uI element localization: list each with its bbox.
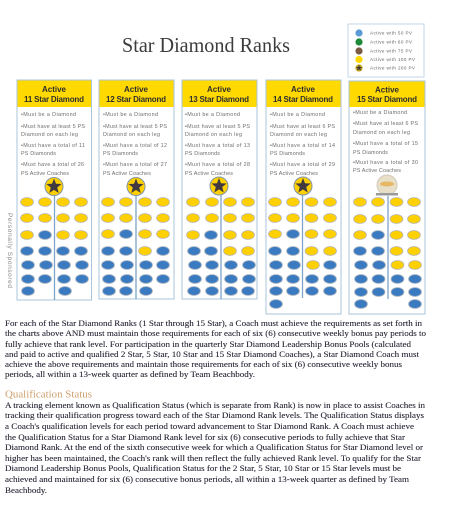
panel: 12 Star Diamond [99,80,174,299]
legend item: 100 PV: Active with 100 PV [370,57,416,62]
requirements: •Must be a Diamond [185,112,240,118]
paragraph: rank requirements: achieve the above requirements and maintain those requirements for each of six (6) consecutive weekly bonus [5,359,403,369]
requirements: Diamond on each leg [353,130,410,136]
paragraph: qualification status: a Coach's qualification levels for each period toward advancement to Star Diamond Rank. A Coach must achieve [5,421,414,431]
requirements: •Must have a total of 26 [21,162,84,168]
requirements [103,112,167,177]
panel: 11 Star Diamond [17,80,92,300]
requirements: •Must have a total of 15 [353,141,418,147]
requirements: PS Active Coaches [21,171,69,177]
requirements: •Must have a total of 28 [185,162,250,168]
requirements: •Must have a total of 12 [103,143,167,149]
heading: Qualification Status: Qualification Status [5,388,92,400]
requirements: •Must be a Diamond [353,110,407,116]
requirements: •Must have a total of 29 [270,162,335,168]
panel header: 13 Star Diamond [189,95,249,104]
requirements [185,112,250,177]
legend item: 200 PV: Active with 200 PV [370,66,416,70]
paragraph: qualification status [5,400,426,495]
coach dots [102,198,169,295]
requirements [21,112,85,177]
requirements: PS Active Coaches [353,168,401,174]
paragraph: rank requirements: the charts above AND must maintain those requirements for each of six (6) consecutive weekly bonus pay periods to [5,328,426,338]
panel header: Active [207,85,232,94]
panel header: Active [375,86,400,94]
requirements: •Must be a Diamond [103,112,158,118]
requirements: Diamond on each leg [270,132,327,138]
requirements: PS Active Coaches [103,171,151,177]
paragraph: rank requirements [5,318,426,379]
coach dots [187,198,255,295]
requirements: •Must have a total of 30 [353,160,418,166]
panel header: 11 Star Diamond [24,95,84,104]
paragraph: rank requirements: For each of the Star Diamond Ranks (1 Star through 15 Star), a Coach must achieve the requirements as set forth in [5,318,423,328]
legend item: 60 PV: Active with 60 PV [370,40,413,44]
requirements: •Must have at least 5 PS [103,124,167,130]
requirements: •Must have at least 6 PS [353,121,418,127]
paragraph: qualification status: achieved and maintained for six (6) consecutive bonus periods, all within a 13-week quarter as defined by Team [5,474,409,484]
requirements: •Must have a total of 11 [21,143,85,149]
requirements: PS Diamonds [270,151,305,157]
panel: 15 Star Diamond [349,81,425,314]
panel header [18,80,91,107]
requirements: PS Diamonds [353,150,388,156]
paragraph: rank requirements: fully achieve that rank level. For participation in the quarterly Star Diamond Leadership Bonus Pools (calculated [5,339,412,349]
paragraph: qualification status: tracking their qualification progress toward each of the Star Diamond Rank levels. The Qualification Status displays [5,410,425,420]
paragraph: qualification status: Diamond Leadership Bonus Pools, Qualification Status for the 2 Star, 5 Star, 10 Star or 15 Star levels must be [5,463,401,473]
coach dots [354,198,421,308]
side label: Personally Sponsored [6,213,13,288]
panel: 13 Star Diamond [182,80,257,299]
requirements: •Must have at least 6 PS [270,124,335,130]
legend [348,24,424,77]
title: Star Diamond Ranks [122,33,290,57]
panel header [350,82,424,107]
panel header [182,80,256,107]
requirements: •Must be a Diamond [270,112,325,118]
panel header: Active [42,85,67,94]
requirements: PS Diamonds [185,151,220,157]
paragraph: qualification status: the Qualification Status for a Star Diamond Rank level for six (6) consecutive periods to fully achieve that Star [5,432,405,442]
logo medal [376,175,398,196]
legend item: 50 PV: Active with 50 PV [370,30,413,36]
star medal [45,178,63,196]
panel header [266,80,340,107]
requirements: PS Diamonds [103,151,138,157]
requirements: •Must have at least 5 PS [21,124,85,130]
requirements [353,110,418,174]
requirements: Diamond on each leg [185,132,242,138]
requirements [270,112,335,177]
panel header [100,80,174,107]
requirements: PS Active Coaches [270,171,318,177]
paragraph: rank requirements: and paid to active and qualified 2 Star, 5 Star, 10 Star and 15 Star Diamond Coaches), a Star Diamond Coach must [5,349,420,359]
star medal [294,177,312,195]
coach dots [269,198,336,308]
requirements: Diamond on each leg [103,132,160,138]
legend item: 75 PV: Active with 75 PV [370,48,413,54]
panel header: 15 Star Diamond [357,95,417,104]
panel header: 12 Star Diamond [106,95,166,104]
requirements: •Must be a Diamond [21,112,76,118]
paragraph: qualification status: Beachbody. [5,485,47,495]
panel header: Active [291,85,316,94]
paragraph: qualification status: Diamond Rank. At the end of the sixth consecutive week for which a Qualification Status for Star Diamond level or [5,442,423,452]
paragraph: qualification status: higher has been maintained, the Coach's rank will then reflect the fully achieved Rank level. To qualify for the Star [5,453,421,463]
requirements: •Must have a total of 14 [270,143,335,149]
panel: 14 Star Diamond [266,80,341,314]
star medal [127,178,145,196]
paragraph: qualification status: A tracking element known as Qualification Status (which is separate from Rank) is now in place to assist Coaches in [5,400,426,410]
paragraph: rank requirements: periods, all within a 13-week quarter as defined by Team Beachbody. [5,369,255,379]
requirements: Diamond on each leg [21,132,78,138]
requirements: •Must have a total of 13 [185,143,250,149]
star medal [210,177,228,195]
coach dots [21,198,88,295]
requirements: •Must have a total of 27 [103,162,167,168]
requirements: PS Active Coaches [185,171,233,177]
panel header: 14 Star Diamond [273,95,333,104]
panel header: Active [124,85,149,94]
requirements: PS Diamonds [21,151,56,157]
requirements: •Must have at least 5 PS [185,124,250,130]
